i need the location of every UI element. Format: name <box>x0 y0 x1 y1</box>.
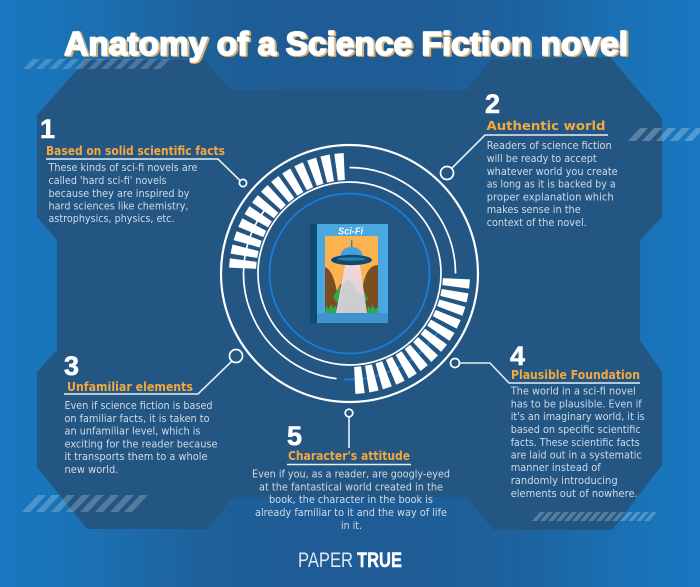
heading 2: Authentic world <box>486 119 606 134</box>
text block 4: are laid out in a systematic <box>511 448 642 462</box>
text block 4: it's an imaginary world, it is <box>511 410 645 423</box>
node 5 <box>345 409 353 417</box>
text block 5: Even if you, as a reader, are googly-eyed <box>252 468 450 481</box>
text block 5: in it. <box>341 519 362 532</box>
text block 5: already familiar to it and the way of life <box>255 506 447 519</box>
inner blue ring <box>270 194 430 354</box>
connector 2 <box>452 135 608 168</box>
icon: sci-fi book with UFO <box>310 224 388 323</box>
callout 4 <box>450 341 645 500</box>
text block 2: as long as it is backed by a <box>487 178 616 190</box>
callout 1 <box>40 114 247 225</box>
tick marks: upper left <box>229 153 346 270</box>
tractor beam <box>336 265 367 313</box>
callout 5 <box>252 409 450 532</box>
logo: Paper True <box>298 549 402 572</box>
decorative stripes: top left <box>23 59 170 69</box>
text block 4: based on specific scientific <box>511 423 641 436</box>
text block 5: book, the character in the book is <box>269 493 433 506</box>
connector 4 <box>460 363 640 383</box>
logo: Paper True: PAPER <box>298 549 353 572</box>
node 4 <box>450 358 460 368</box>
number 3: 3 <box>64 351 79 381</box>
node 3 <box>230 350 242 362</box>
text block 1: called 'hard sci-fi' novels <box>48 174 167 187</box>
text block 3: new world. <box>64 463 118 476</box>
middle ring <box>258 182 441 365</box>
white arc: top to right <box>350 168 456 274</box>
text block 4: manner instead of <box>511 461 601 474</box>
text block 3: Even if science fiction is based <box>64 399 212 412</box>
text block 3: it transports them to a whole <box>64 450 208 463</box>
text block 3: exciting for the reader because <box>64 438 218 450</box>
blue arc: lower right <box>344 330 439 380</box>
text block 3 <box>64 399 218 476</box>
text block 1: These kinds of sci-fi novels are <box>48 161 198 174</box>
bushes <box>333 286 343 303</box>
text block 1: because they are inspired by <box>48 187 190 200</box>
number 2: 2 <box>485 89 500 119</box>
central dark panel <box>37 57 662 530</box>
decorative stripes: bottom right <box>532 512 657 521</box>
text block 4 <box>510 384 645 500</box>
number 4: 4 <box>510 341 525 371</box>
grass <box>325 304 337 313</box>
decorative stripes: bottom left <box>22 495 148 512</box>
circular diagram <box>221 145 478 402</box>
outer ring <box>221 145 478 402</box>
text block 3: an unfamiliar level, which is <box>64 424 201 438</box>
connector 1 <box>46 159 240 180</box>
UFO dome <box>340 247 363 258</box>
book cover <box>317 224 388 323</box>
text block 1: astrophysics, physics, etc. <box>48 212 174 225</box>
callout 3 <box>64 350 242 476</box>
text block 2: will be ready to accept <box>487 152 597 165</box>
text block 2: context of the novel. <box>487 216 587 229</box>
cover art background <box>325 236 378 313</box>
text block 2: proper explanation which <box>487 190 614 204</box>
text block 4: has to be plausible. Even if <box>511 398 642 410</box>
node 2 <box>440 166 454 180</box>
hills <box>325 267 348 313</box>
text block 1: hard sciences like chemistry, <box>48 200 188 212</box>
text block 2: whatever world you create <box>487 165 618 178</box>
text block 4: facts. These scientific facts <box>511 436 640 449</box>
text block 5: at the fantastical world created in the <box>259 480 443 494</box>
number 5: 5 <box>287 421 302 451</box>
connector 3 <box>64 361 232 394</box>
text block 1 <box>48 161 198 225</box>
white arc: bottom to upper left <box>244 205 337 379</box>
node 1 <box>239 179 247 187</box>
text block 4: The world in a sci-fi novel <box>510 384 636 398</box>
text block 2 <box>487 139 618 229</box>
tick marks: lower right <box>353 277 470 394</box>
text block 2: Readers of science fiction <box>487 139 612 152</box>
heading 4: Plausible Foundation <box>511 368 640 383</box>
heading 3: Unfamiliar elements <box>67 380 193 395</box>
UFO antenna <box>351 240 352 247</box>
decorative stripes: right <box>628 128 700 141</box>
heading 1: Based on solid scientific facts <box>46 144 225 159</box>
number 1: 1 <box>40 114 55 144</box>
text block 4: randomly introducing <box>511 474 618 487</box>
text block 4: elements out of nowhere. <box>511 487 638 500</box>
text block 5 <box>252 468 450 532</box>
text block 3: on familiar facts, it is taken to <box>64 412 210 425</box>
callout 2 <box>440 89 618 229</box>
text block 2: makes sense in the <box>487 203 581 216</box>
UFO saucer <box>331 255 372 265</box>
heading 5: Character's attitude <box>288 449 410 464</box>
logo: Paper True: TRUE <box>357 549 402 572</box>
book spine <box>310 224 317 323</box>
connector 5 <box>287 417 411 464</box>
cover title: Sci-Fi <box>338 226 363 238</box>
title: Anatomy of a Science Fiction novel <box>64 25 628 62</box>
